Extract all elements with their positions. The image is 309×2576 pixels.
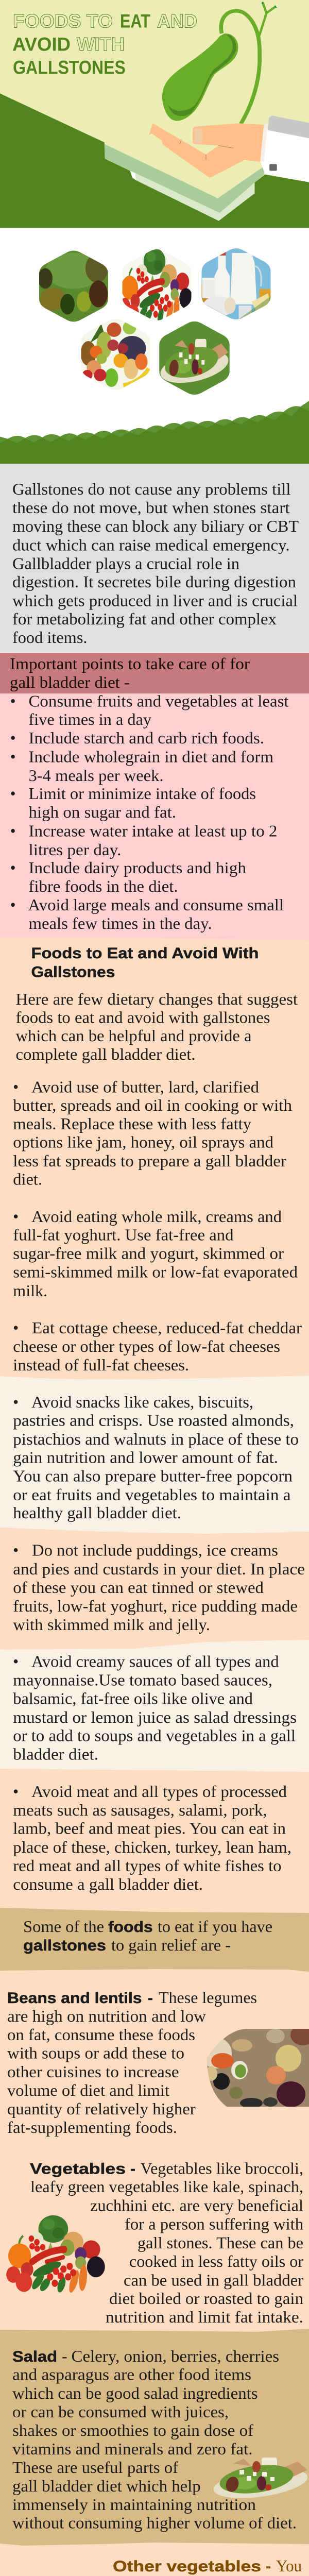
bullet: meats: place of these, chicken, turkey, lean ham, [13,1838,291,1856]
bullet: butter and oils: options like jam, honey, oil sprays and [13,1132,273,1151]
section heading [31,945,259,981]
section intro [15,990,298,1063]
salad text: Celery, onion, berries, cherries [71,2347,279,2365]
title: AND [157,10,197,32]
panel: important points [0,653,309,941]
important points list: meals few times in the day. [29,914,212,933]
bullet: cheese: instead of full-fat cheeses. [13,1355,189,1374]
salad text: without consuming higher volume of diet. [12,2513,297,2532]
icon: salad photo [212,2458,309,2503]
bullet: milk: • [13,1207,19,1226]
important points list: five times in a day [29,710,151,728]
title: FOODS TO [13,10,113,32]
bullet: butter and oils: less fat spreads to prepare a gall bladder [13,1151,286,1170]
bullet: puddings: with skimmed milk and jelly. [13,1615,210,1634]
bullet: sauces: Avoid creamy sauces of all types and [31,1652,279,1670]
bullet: butter and oils: diet. [13,1170,42,1188]
bullet: puddings: and pies and custards in your diet. In place [13,1560,305,1578]
intro text: these do not move, but when stones start [12,498,290,517]
important points list: • [10,784,16,803]
important points list: Include dairy products and high [29,858,246,877]
salad text: gall bladder diet which help [12,2477,201,2495]
important points list: Include starch and carb rich foods. [29,728,264,747]
food hexagon cluster [38,245,272,398]
bullet: meats: • [13,1782,19,1801]
vegetables text: Vegetables like broccoli, [140,2159,303,2177]
beans and lentils text: - [148,1990,153,2007]
bullet: meats: meats such as sausages, salami, pork, [13,1801,267,1819]
bullet: milk: semi-skimmed milk or low-fat evaporated [13,1262,298,1281]
salad text: vitamins and minerals and zero fat. [12,2439,253,2458]
icon: hexagon fruits [81,319,150,390]
section intro: foods to eat and avoid with gallstones [15,1008,270,1026]
vegetables text: nutrition and limit fat intake. [106,2308,303,2326]
important points list: • [10,728,16,747]
bullet: sauces [13,1652,297,1763]
foods to eat callout text: to eat if you have [158,1917,272,1936]
bullet: butter and oils: meals. Replace these with less fatty [13,1114,251,1133]
title: GALLSTONES [13,57,126,78]
important points list: • [10,691,16,710]
icon: beans and lentils photo [207,2029,309,2107]
bullet: cheese: cheese or other types of low-fat cheeses [13,1337,280,1355]
bullet: snacks [13,1393,299,1522]
bullet: sauces: bladder diet. [13,1744,98,1763]
title [12,10,197,78]
intro text: for metabolizing fat and other complex [12,609,277,628]
bullet: puddings: fruits, low-fat yoghurt, rice pudding made [13,1597,298,1615]
bullet: meats: consume a gall bladder diet. [13,1875,203,1893]
section heading: Foods to Eat and Avoid With [31,945,259,962]
panel: meats [0,1769,309,1917]
important points heading [10,654,250,691]
bullet: sauces: mayonnaise.Use tomato based sauces, [13,1670,272,1689]
other vegetables text: Other vegetables [113,2558,261,2575]
beans and lentils text: These legumes [159,1988,257,2007]
icon: doctor hand and cuff [149,116,309,182]
bullet: puddings [13,1540,305,1634]
bullet: meats: Avoid meat and all types of processed [31,1782,287,1801]
bullet: puddings: of these you can eat tinned or stewed [13,1578,264,1597]
important points list: 3-4 meals per week. [29,766,164,785]
vegetables text: Vegetables [30,2161,126,2177]
salad text: and asparagus are other food items [12,2365,251,2383]
bullet: snacks: or eat fruits and vegetables to maintain a [13,1485,291,1504]
icon: hexagon dairy [202,248,271,319]
section intro: complete gall bladder diet. [15,1045,196,1063]
bullet: meats [13,1782,291,1893]
intro text: duct which can raise medical emergency. [12,536,290,554]
beans and lentils text: on fat, consume these foods [7,2025,195,2044]
important points list [10,691,289,933]
bullet: butter and oils: Avoid use of butter, lard, clarified [31,1078,259,1096]
other vegetables text: You [276,2556,302,2575]
title: EAT [120,10,150,32]
important points list: • [10,747,16,766]
hero green ground and folded layers [0,93,309,228]
icon: hexagon salad [159,321,230,395]
important points list: fibre foods in the diet. [29,877,178,895]
vegetables text: - [130,2161,135,2177]
salad text: or can be consumed with juices, [12,2402,229,2421]
intro text: digestion. It secretes bile during digestion [12,572,296,591]
salad text: - [62,2347,67,2365]
bullet: snacks: pistachios and walnuts in place of these to [13,1430,299,1448]
beans and lentils text [7,1988,257,2137]
vegetables text: for a person suffering with [125,2214,303,2233]
intro text: Gallstones do not cause any problems till [12,480,291,498]
salad text [12,2347,297,2532]
vegetables text [30,2159,303,2326]
icon: hexagon nuts and legumes [39,250,108,321]
important points list: Include wholegrain in diet and form [29,747,273,766]
foods to eat callout text [23,1917,272,1954]
bullet: sauces: mustard or lemon juice as salad dressings [13,1708,297,1726]
beans and lentils text: are high on nutrition and low [7,2007,206,2025]
bullet: cheese: • [13,1318,19,1337]
beans and lentils text: quantity of relatively higher [7,2099,196,2118]
bullet: snacks: pastries and crisps. Use roasted almonds, [13,1411,294,1429]
beans and lentils text: volume of diet and limit [7,2081,169,2099]
foods to eat callout text: foods [108,1919,153,1936]
green scalloped band [0,401,309,464]
bullet: milk: full-fat yoghurt. Use fat-free and [13,1225,234,1244]
title: AVOID [12,33,71,55]
intro text: Gallbladder plays a crucial role in [12,554,239,573]
bullet: milk: Avoid eating whole milk, creams and [31,1207,282,1226]
bullet: butter and oils: butter, spreads and oil in cooking or with [13,1096,292,1114]
bullet: milk: sugar-free milk and yogurt, skimmed or [13,1244,284,1262]
other vegetables text [19,2556,305,2576]
bullet: meats: red meat and all types of white fishes to [13,1856,282,1875]
important points heading: Important points to take care of for [10,654,250,673]
beans and lentils text: other cuisines to increase [7,2062,179,2081]
other vegetables text: - [266,2558,271,2575]
vegetables text: can be used in gall bladder [124,2271,303,2290]
intro text: food items. [12,628,88,647]
hero banner [0,0,309,228]
panel: beans and vegetables [0,1969,309,2334]
bullet: snacks: Avoid snacks like cakes, biscuits, [31,1393,253,1411]
vegetables text: zuchhini etc. are very beneficial [90,2196,303,2214]
important points list: Consume fruits and vegetables at least [29,691,289,710]
bullet: butter and oils [13,1078,292,1188]
important points heading: gall bladder diet - [10,673,130,691]
bullet: snacks: • [13,1393,19,1411]
salad text: immensely in maintaining nutrition [12,2495,256,2514]
bullet: cheese [13,1318,302,1374]
panel: puddings [0,1528,309,1651]
panel: snacks [0,1376,309,1535]
foods to eat callout text: Some of the [23,1917,104,1936]
salad text: which can be good salad ingredients [12,2384,258,2402]
bullet: snacks: gain nutrition and lower amount of fat. [13,1448,278,1466]
section heading: Gallstones [31,963,115,981]
intro text: moving these can block any biliary or CBT [12,517,299,535]
section intro: Here are few dietary changes that suggest [15,990,298,1008]
salad text: Salad [12,2348,57,2365]
intro text [12,480,299,647]
important points list: Avoid large meals and consume small [28,895,284,914]
bullet: snacks: You can also prepare butter-free popcorn [13,1466,293,1485]
vegetables text: cooked in less fatty oils or [129,2252,303,2270]
icon: vegetables photo [6,2215,105,2294]
bullet: meats: lamb, beef and meat pies. You can eat in [13,1819,286,1837]
bullet: sauces: • [13,1652,19,1670]
panel: introduction [0,464,309,653]
panel: sauces [0,1640,309,1775]
icon: gallbladder and ducts [162,2,277,124]
important points list: Limit or minimize intake of foods [29,784,256,803]
section intro: which can be helpful and provide a [15,1026,251,1045]
important points list: Increase water intake at least up to 2 [29,821,277,840]
panel: salad [0,2329,309,2548]
important points list: • [10,858,16,877]
vegetables text: gall stones. These can be [138,2233,303,2252]
salad text: shakes or smoothies to gain dose of [12,2421,253,2439]
title: WITH [77,33,125,55]
panel: other vegetables [0,2543,309,2576]
bullet: sauces: or to add to soups and vegetables in a gall [13,1726,296,1744]
beans and lentils text: fat-supplementing foods. [7,2118,177,2137]
vegetables text: diet boiled or roasted to gain [109,2289,303,2308]
bullet: cheese: Eat cottage cheese, reduced-fat cheddar [32,1318,302,1337]
beans and lentils text: Beans and lentils [7,1990,142,2007]
beans and lentils text: with soups or add these to [7,2043,184,2062]
panel: foods to eat and avoid [0,938,309,1381]
vegetables text: leafy green vegetables like kale, spinach, [30,2177,303,2196]
bullet: puddings: • [13,1540,19,1559]
salad text: These are useful parts of [12,2458,178,2477]
important points list: litres per day. [29,840,122,859]
panel: foods to eat intro [0,1908,309,1976]
bullet: sauces: balsamic, fat-free oils like olive and [13,1689,253,1707]
bullet: snacks: healthy gall bladder diet. [13,1503,181,1522]
bullet: puddings: Do not include puddings, ice creams [32,1540,278,1559]
bullet: milk: milk. [13,1281,47,1300]
intro text: which gets produced in liver and is crucial [12,591,298,610]
icon: hexagon vegetables [123,249,192,320]
foods to eat callout text: gallstones [23,1937,106,1954]
bullet: butter and oils: • [13,1078,19,1096]
bullet: milk [13,1207,298,1300]
foods to eat callout text: to gain relief are - [111,1936,231,1954]
important points list: • [10,821,16,840]
important points list: • [10,895,16,914]
important points list: high on sugar and fat. [29,803,176,821]
